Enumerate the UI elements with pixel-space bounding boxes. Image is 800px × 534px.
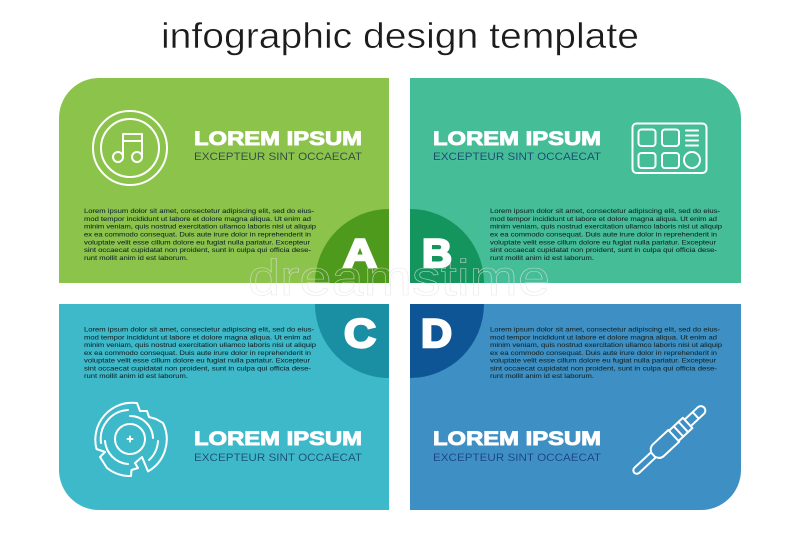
text block: B: mod tempor incididunt ut labore et dolore magna aliqua. Ut enim ad: [490, 216, 717, 223]
heading: C: EXCEPTEUR SINT OCCAECAT: [194, 452, 362, 464]
icon: disc: [95, 403, 167, 476]
badge: B: B: [422, 232, 452, 276]
text block: B: voluptate velit esse cillum dolore eu fugiat nulla pariatur. Excepteur: [490, 239, 717, 246]
text block: C: minim veniam, quis nostrud exercitation ullamco laboris nisi ut aliquip: [84, 342, 316, 349]
heading: A: LOREM IPSUM: [194, 128, 362, 150]
icon: audio jack: [629, 402, 710, 479]
badge: C: [315, 304, 389, 378]
heading: A: EXCEPTEUR SINT OCCAECAT: [194, 151, 362, 163]
icon: music note: [93, 111, 167, 185]
text block: B: minim veniam, quis nostrud exercitation ullamco laboris nisi ut aliquip: [490, 224, 722, 231]
badge: B: [410, 209, 484, 283]
text block: D: [490, 327, 722, 380]
text block: A: [84, 208, 316, 262]
title: infographic design template: [161, 15, 639, 56]
heading: D: EXCEPTEUR SINT OCCAECAT: [433, 452, 601, 464]
text block: C: [84, 327, 316, 380]
panel: D: [410, 304, 741, 510]
heading: D: LOREM IPSUM: [433, 428, 601, 450]
icon: drum pad: [632, 124, 706, 173]
text block: C: runt mollit anim id est laborum.: [84, 373, 188, 380]
text block: A: mod tempor incididunt ut labore et dolore magna aliqua. Ut enim ad: [84, 216, 311, 223]
text block: C: voluptate velit esse cillum dolore eu fugiat nulla pariatur. Excepteur: [84, 358, 311, 365]
text block: D: Lorem ipsum dolor sit amet, consectetur adipiscing elit, sed do eius-: [490, 327, 720, 334]
text block: A: runt mollit anim id est laborum.: [84, 255, 188, 262]
text block: D: minim veniam, quis nostrud exercitation ullamco laboris nisi ut aliquip: [490, 342, 722, 349]
text block: A: minim veniam, quis nostrud exercitation ullamco laboris nisi ut aliquip: [84, 224, 316, 231]
badge: C: C: [344, 312, 376, 356]
text block: A: voluptate velit esse cillum dolore eu fugiat nulla pariatur. Excepteur: [84, 239, 311, 246]
badge: A: [315, 209, 389, 283]
panel: C: [59, 304, 389, 510]
text block: C: mod tempor incididunt ut labore et dolore magna aliqua. Ut enim ad: [84, 334, 311, 341]
text block: A: Lorem ipsum dolor sit amet, consectetur adipiscing elit, sed do eius-: [84, 208, 314, 215]
text block: B: ex ea commodo consequat. Duis aute irure dolor in reprehenderit in: [490, 232, 717, 238]
text block: C: Lorem ipsum dolor sit amet, consectetur adipiscing elit, sed do eius-: [84, 327, 314, 334]
text block: D: voluptate velit esse cillum dolore eu fugiat nulla pariatur. Excepteur: [490, 358, 717, 365]
text block: D: runt mollit anim id est laborum.: [490, 373, 594, 380]
text block: B: sint occaecat cupidatat non proident, sunt in culpa qui officia dese-: [490, 247, 717, 254]
text block: B: Lorem ipsum dolor sit amet, consectetur adipiscing elit, sed do eius-: [490, 208, 720, 215]
heading: B: [433, 128, 601, 163]
heading: C: LOREM IPSUM: [194, 428, 362, 450]
text block: C: ex ea commodo consequat. Duis aute irure dolor in reprehenderit in: [84, 350, 311, 357]
text block: B: runt mollit anim id est laborum.: [490, 255, 594, 262]
badge: A: A: [343, 232, 377, 276]
heading: C: [194, 428, 362, 464]
heading: A: [194, 128, 362, 163]
text block: D: sint occaecat cupidatat non proident, sunt in culpa qui officia dese-: [490, 365, 717, 372]
heading: D: [433, 428, 601, 464]
panel: B: [410, 78, 741, 283]
text block: B: [490, 208, 722, 262]
watermark: dreamstime: [248, 250, 550, 306]
text block: A: sint occaecat cupidatat non proident, sunt in culpa qui officia dese-: [84, 247, 311, 254]
panel: A: [59, 78, 389, 283]
text block: C: sint occaecat cupidatat non proident, sunt in culpa qui officia dese-: [84, 365, 311, 372]
text block: A: ex ea commodo consequat. Duis aute irure dolor in reprehenderit in: [84, 232, 311, 238]
badge: D: [410, 304, 484, 378]
badge: D: D: [421, 312, 452, 356]
heading: B: LOREM IPSUM: [433, 128, 601, 150]
text block: D: ex ea commodo consequat. Duis aute irure dolor in reprehenderit in: [490, 350, 717, 357]
heading: B: EXCEPTEUR SINT OCCAECAT: [433, 151, 601, 163]
text block: D: mod tempor incididunt ut labore et dolore magna aliqua. Ut enim ad: [490, 334, 717, 341]
